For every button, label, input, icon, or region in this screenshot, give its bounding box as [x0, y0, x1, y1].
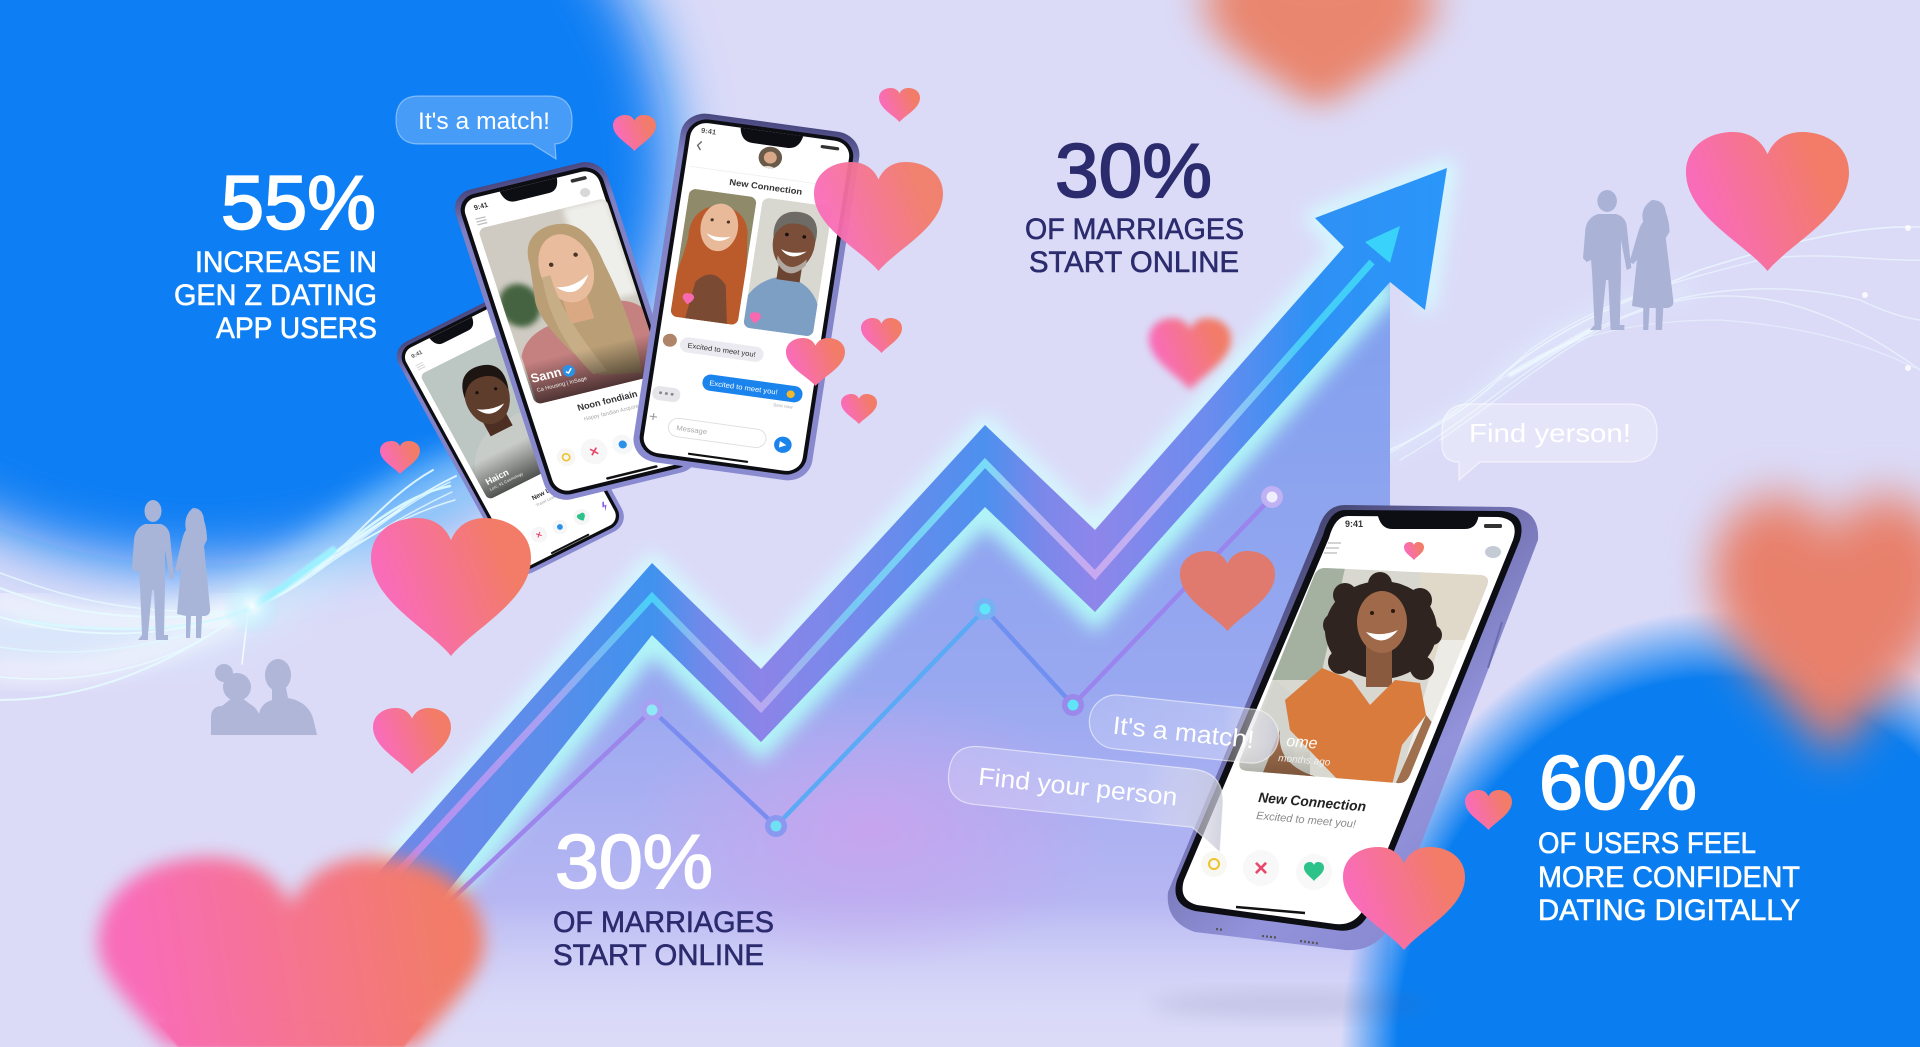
phone: large profile: New Connection: [1258, 789, 1367, 814]
phone: back with man profile: [391, 293, 630, 580]
couple silhouette right: [1583, 190, 1673, 330]
blurred heart middle: [1149, 318, 1231, 390]
phone shadow: [1150, 991, 1430, 1019]
bubble: Find your person: [943, 744, 1228, 852]
blurred heart bottom left: [98, 857, 484, 1047]
heart over phone bottom: [1343, 847, 1465, 950]
phone: chat New Connection: Sent now: [773, 402, 794, 410]
blurred heart top: [1206, 0, 1433, 112]
chart node 1: [641, 699, 663, 721]
phone: back with man profile: New Lo: [531, 486, 555, 502]
chart node 2: [765, 815, 787, 837]
heart small right: [1465, 790, 1512, 830]
blue blob bottom right: [1330, 600, 1920, 1047]
growth arrow band: [340, 168, 1447, 925]
stat: 55 percent: INCREASE IN: [195, 246, 377, 279]
stat: 30 percent top: START ONLINE: [1029, 246, 1239, 279]
bubble: Find your person: Find your person: [977, 763, 1179, 812]
heart on chat edge: [786, 338, 845, 386]
growth arrow centre line: [380, 262, 1372, 892]
stat: 30 percent top: OF MARRIAGES: [1025, 213, 1244, 246]
small heart cluster: top: [879, 88, 920, 122]
phone: chat New Connection: Excited to meet you!: [709, 379, 778, 396]
light wave right: [1272, 227, 1920, 497]
couple silhouette left: [132, 500, 210, 640]
heart small near bubble: [613, 115, 656, 151]
phone: chat New Connection: +: [648, 409, 659, 426]
phone: large profile: 9:41: [1345, 519, 1363, 529]
stat: 55 percent: 55%: [221, 161, 376, 246]
bubble: Find yerson: Find yerson!: [1469, 418, 1631, 448]
stat: 55 percent: GEN Z DATING: [174, 279, 377, 312]
top glow of growth arrow: [340, 168, 1447, 916]
phone: large profile: months ago: [1278, 753, 1331, 769]
chart node 4: [1062, 694, 1084, 716]
heart lower right of chat: [841, 394, 877, 424]
stat: 30 percent top: 30%: [1055, 129, 1212, 214]
glow node left: [222, 576, 282, 636]
phone: back with man profile: ×: [534, 529, 545, 541]
area under growth arrow: [450, 282, 1390, 980]
phone: profile Sann: 9:41: [473, 202, 489, 212]
phone: chat New Connection: Excited to meet you!: [687, 341, 756, 359]
stat: 30 percent bottom: [553, 820, 774, 972]
blue blob top left: [0, 0, 670, 565]
stat: 60 percent: DATING DIGITALLY: [1538, 894, 1800, 927]
phone: profile Sann: Ca Housing | InSage: [536, 376, 588, 394]
growth arrow inner head: [1365, 226, 1400, 263]
heart top right: [1686, 132, 1849, 271]
stat: 60 percent: MORE CONFIDENT: [1538, 861, 1800, 894]
stat: 60 percent: OF USERS FEEL: [1538, 827, 1756, 860]
stat: 30 percent bottom: START ONLINE: [553, 939, 764, 972]
blurred heart right: [1712, 496, 1920, 758]
stat: 55 percent: [174, 161, 377, 345]
chart node 3: [974, 598, 996, 620]
heart coral centre: [1180, 551, 1275, 631]
phone: large profile: Excited to meet you!: [1256, 810, 1356, 831]
bubble: Find yerson: [1442, 404, 1657, 480]
phone: large profile: ome: [1286, 733, 1318, 753]
phone: chat New Connection: New Connection: [729, 177, 803, 197]
stat: 60 percent: 60%: [1539, 741, 1697, 826]
phone: chat New Connection: [630, 111, 863, 483]
bubble: It's a match top: It's a match!: [418, 108, 550, 135]
bubble: It's a match lower: It's a match!: [1112, 712, 1256, 754]
heart large left: [371, 518, 531, 656]
bust couple silhouette: [211, 659, 317, 735]
phone: profile Sann: Noon fondiain: [576, 389, 639, 413]
heart right of chat: [861, 318, 902, 353]
phone: back with man profile: Lorc, 91 Cosmology: [489, 471, 525, 492]
phone: back with man profile: Haicn: [484, 467, 510, 487]
heart lower left: [373, 708, 451, 774]
stat: 30 percent bottom: OF MARRIAGES: [553, 906, 774, 939]
phone: chat New Connection: 9:41: [700, 126, 717, 137]
phone: profile Sann: ×: [587, 443, 601, 461]
stat: 30 percent bottom: 30%: [555, 820, 713, 905]
phone: large profile: ×: [1254, 855, 1268, 882]
line chart: [430, 497, 1272, 920]
light wave left: [0, 470, 460, 700]
phone: profile Sann: [449, 158, 703, 504]
stat: 60 percent: [1538, 741, 1800, 927]
phone: chat New Connection: Message: [676, 423, 708, 436]
stat: 55 percent: APP USERS: [216, 312, 377, 345]
phone: back with man profile: 9:41: [411, 349, 424, 360]
phone: back with man profile: Travel Lover: [535, 493, 558, 508]
phone: profile Sann: Happy fandian Acquire: [583, 404, 640, 423]
heart over chat phone: [814, 162, 943, 271]
chart node 5: [1261, 486, 1283, 508]
phone: large profile: [1168, 505, 1538, 950]
stat: 30 percent top: [1025, 129, 1244, 279]
phone: profile Sann: Sann: [529, 365, 563, 386]
bubble: It's a match lower: [1087, 692, 1281, 766]
bubble: It's a match top: [396, 96, 572, 159]
heart left small: [380, 441, 420, 474]
